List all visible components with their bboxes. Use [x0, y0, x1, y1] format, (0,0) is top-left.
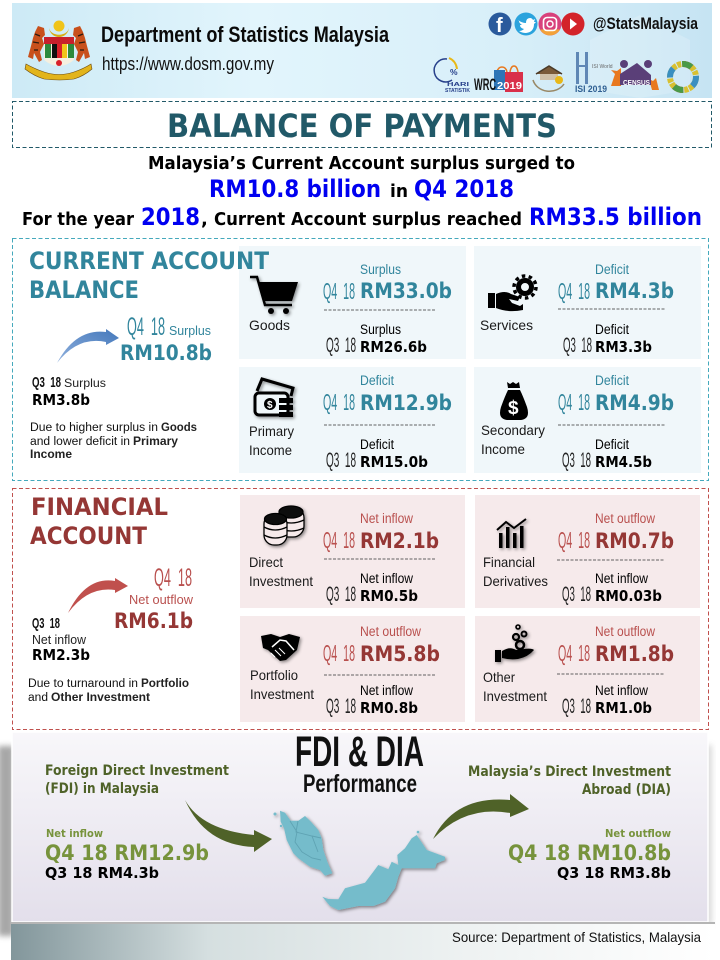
icon: hand with coins [495, 625, 534, 662]
event logos: % [450, 67, 458, 77]
explanatory note: and [28, 692, 48, 704]
icon: instagram [538, 12, 562, 36]
heading: financial account [30, 493, 168, 550]
icon: banknotes: $ [267, 400, 273, 411]
heading: FDI and DIA [295, 728, 424, 798]
previous quarter figure: Q3 18 [32, 374, 61, 391]
card: direct investment: Investment [249, 573, 313, 589]
card: portfolio investment: Portfolio [250, 667, 298, 683]
card: other investment: Net outflow [595, 624, 655, 639]
card: direct investment: Net inflow [360, 511, 413, 526]
card: secondary income [474, 367, 701, 473]
event logos: CENSUS [623, 80, 650, 87]
headline summary: , [201, 209, 208, 230]
card: other investment: Q4 18 [558, 640, 590, 666]
previous quarter figure: RM3.8b [32, 391, 90, 409]
icon: twitter [514, 12, 538, 36]
arrow: DIA out of Malaysia [433, 794, 529, 839]
DIA column: Q4 18 RM10.8b [508, 841, 671, 865]
header banner [12, 3, 712, 98]
headline summary: in [390, 181, 408, 202]
card: secondary income: RM4.5b [595, 453, 652, 471]
card: services: Q3 18 [563, 334, 592, 357]
card: goods: Surplus [360, 322, 401, 337]
card: secondary income: Q3 18 [562, 449, 591, 472]
FDI column: Net inflow [46, 827, 103, 840]
card: financial derivatives [475, 495, 700, 608]
card: primary income: Q4 18 [323, 389, 355, 415]
icon: handshake [261, 634, 300, 661]
explanatory note: Income [30, 449, 72, 461]
panel: FDI and DIA performance [0, 728, 712, 936]
icon: facebook [488, 12, 512, 37]
icon: youtube [562, 12, 584, 36]
card: direct investment: Q3 18 [326, 583, 356, 606]
icon: bar chart with trend line [497, 519, 526, 548]
card: financial derivatives: Q4 18 [558, 527, 590, 553]
icon: coins [264, 506, 304, 545]
heading: FDI and DIA: FDI & DIA [295, 728, 424, 776]
explanatory note: Goods [161, 422, 197, 434]
card: primary income: Q3 18 [326, 449, 356, 472]
heading: current account balance: BALANCE [29, 276, 139, 304]
card: portfolio investment: RM5.8b [360, 642, 440, 666]
card: secondary income: Deficit [595, 373, 629, 388]
arrow: red curve [68, 578, 128, 613]
card: goods: RM26.6b [360, 338, 427, 356]
card: direct investment: Direct [249, 554, 283, 570]
card: other investment [475, 616, 700, 722]
title [12, 102, 712, 148]
card: direct investment: RM0.5b [360, 587, 418, 605]
previous quarter figure [32, 615, 90, 664]
card: services [474, 246, 701, 359]
heading: financial account: ACCOUNT [30, 522, 148, 550]
card: services: Deficit [595, 322, 629, 337]
card: financial derivatives: Derivatives [483, 573, 548, 589]
headline summary: Q4 2018 [414, 175, 514, 203]
icon: money bag: $ [508, 398, 519, 419]
FDI column [45, 763, 229, 882]
heading: financial account: FINANCIAL [31, 493, 168, 521]
card: other investment: RM1.0b [595, 699, 652, 717]
FDI column: Q4 18 RM12.9b [45, 841, 209, 865]
card: other investment: Q3 18 [562, 695, 591, 718]
card: direct investment: RM2.1b [360, 529, 439, 553]
event logos: HARI [447, 82, 470, 88]
card: primary income: Primary [249, 423, 294, 439]
FDI column: (FDI) in Malaysia [45, 781, 159, 797]
card: services: Deficit [595, 262, 629, 277]
card: financial derivatives: Financial [483, 554, 535, 570]
current quarter figure: Surplus [169, 323, 211, 338]
headline summary: RM33.5 billion [529, 203, 702, 231]
card: financial derivatives: Net outflow [595, 511, 655, 526]
icon: shopping cart [250, 277, 298, 314]
card: goods: Q3 18 [326, 334, 356, 357]
explanatory note [30, 422, 197, 461]
heading: current account balance: CURRENT ACCOUNT [29, 247, 270, 275]
explanatory note: Portfolio [141, 678, 189, 690]
DIA column [468, 764, 671, 882]
event logos: 2019 [497, 81, 522, 92]
card: primary income: RM12.9b [360, 391, 452, 415]
current quarter figure: Q4 18 [127, 313, 165, 341]
card: services: RM3.3b [595, 338, 652, 356]
card: financial derivatives: RM0.7b [595, 529, 674, 553]
card: other investment: RM1.8b [595, 642, 674, 666]
card: goods: Q4 18 [323, 278, 355, 304]
card: portfolio investment: Q4 18 [323, 640, 355, 666]
card: primary income: RM15.0b [360, 453, 428, 471]
card: financial derivatives: Net inflow [595, 571, 648, 586]
card: other investment: Net inflow [595, 683, 648, 698]
card: portfolio investment: Investment [250, 686, 314, 702]
card: secondary income: RM4.9b [595, 391, 674, 415]
headline summary: RM10.8 billion [209, 175, 381, 203]
card: goods: Goods [249, 317, 290, 333]
explanatory note: and lower deficit in [30, 436, 130, 448]
DIA column: Malaysia’s Direct Investment [468, 764, 671, 780]
headline summary: Malaysia’s Current Account surplus surged to [148, 153, 575, 174]
organisation name: Department of Statistics Malaysia [101, 22, 390, 47]
card: primary income: Income [249, 442, 292, 458]
DIA column: Abroad (DIA) [582, 782, 671, 798]
DIA column: Q3 18 RM3.8b [557, 864, 671, 882]
source bar: Source: Department of Statistics, Malaysia [452, 929, 701, 945]
card: primary income: Deficit [360, 373, 394, 388]
title: BALANCE OF PAYMENTS [167, 107, 557, 145]
FDI column: Foreign Direct Investment [45, 763, 229, 779]
event logos [434, 52, 696, 94]
event logos: ISI 2019 [575, 84, 607, 94]
card: services: Services [480, 317, 533, 333]
FDI column: Q3 18 RM4.3b [45, 864, 159, 882]
icon: facebook: f [496, 15, 503, 37]
arrow: FDI into Malaysia [185, 800, 272, 852]
current quarter figure: RM10.8b [120, 341, 212, 365]
card: portfolio investment: RM0.8b [360, 699, 418, 717]
previous quarter figure: Q3 18 [32, 615, 60, 632]
event logos: WRC [474, 75, 496, 94]
icon: money bag [500, 382, 528, 420]
card: portfolio investment: Q3 18 [326, 695, 356, 718]
headline summary: For the year [22, 209, 134, 230]
card: services: RM4.3b [595, 279, 674, 303]
previous quarter figure: RM2.3b [32, 646, 90, 664]
card: other investment: Other [483, 669, 515, 685]
card: secondary income: Income [481, 441, 525, 457]
icon: hand with gear [488, 276, 536, 311]
explanatory note: Due to turnaround in [28, 678, 138, 690]
card: goods: Surplus [360, 262, 401, 277]
explanatory note: Other Investment [51, 692, 150, 704]
headline summary: 2018 [141, 203, 200, 231]
card: primary income [239, 367, 466, 473]
current quarter figure: Q4 18 [154, 564, 192, 592]
headline summary [22, 153, 702, 231]
panel: financial account [12, 488, 708, 730]
icon: coat of arms [25, 20, 92, 80]
card: financial derivatives: Q3 18 [562, 583, 591, 606]
explanatory note [28, 678, 189, 704]
card: services: Q4 18 [558, 278, 590, 304]
card: goods [239, 246, 466, 359]
explanatory note: Primary [133, 436, 179, 448]
card: portfolio investment: Net outflow [360, 624, 421, 639]
heading: FDI and DIA: Performance [303, 770, 417, 798]
map of Malaysia [274, 811, 445, 910]
panel: current account balance [12, 238, 708, 480]
event logos: STATISTIK [445, 88, 470, 94]
card: direct investment: Q4 18 [323, 527, 355, 553]
headline summary: Current Account surplus reached [214, 209, 522, 230]
DIA column: Net outflow [605, 827, 671, 840]
current quarter figure: RM6.1b [114, 609, 193, 633]
heading: current account balance [29, 247, 270, 304]
card: financial derivatives: RM0.03b [595, 587, 662, 605]
social handle: @StatsMalaysia [593, 14, 698, 33]
card: portfolio investment [240, 616, 465, 722]
current quarter figure [114, 564, 194, 633]
explanatory note: Due to higher surplus in [30, 422, 158, 434]
card: goods: RM33.0b [360, 279, 452, 303]
card: portfolio investment: Net inflow [360, 683, 413, 698]
card: secondary income: Q4 18 [558, 389, 590, 415]
previous quarter figure: Net inflow [32, 633, 87, 647]
card: primary income: Deficit [360, 437, 394, 452]
card: secondary income: Secondary [481, 422, 545, 438]
event logos: ISI World [592, 64, 613, 70]
previous quarter figure [32, 374, 106, 409]
icon: banknotes [255, 379, 293, 417]
card: secondary income: Deficit [595, 437, 629, 452]
current quarter figure [120, 313, 212, 365]
website: https://www.dosm.gov.my [102, 54, 274, 74]
card: direct investment [240, 495, 465, 608]
card: other investment: Investment [483, 688, 547, 704]
arrow: blue curve [57, 329, 119, 363]
current quarter figure: Net outflow [129, 592, 194, 607]
source bar [11, 922, 715, 960]
previous quarter figure: Surplus [64, 376, 106, 390]
card: direct investment: Net inflow [360, 571, 413, 586]
